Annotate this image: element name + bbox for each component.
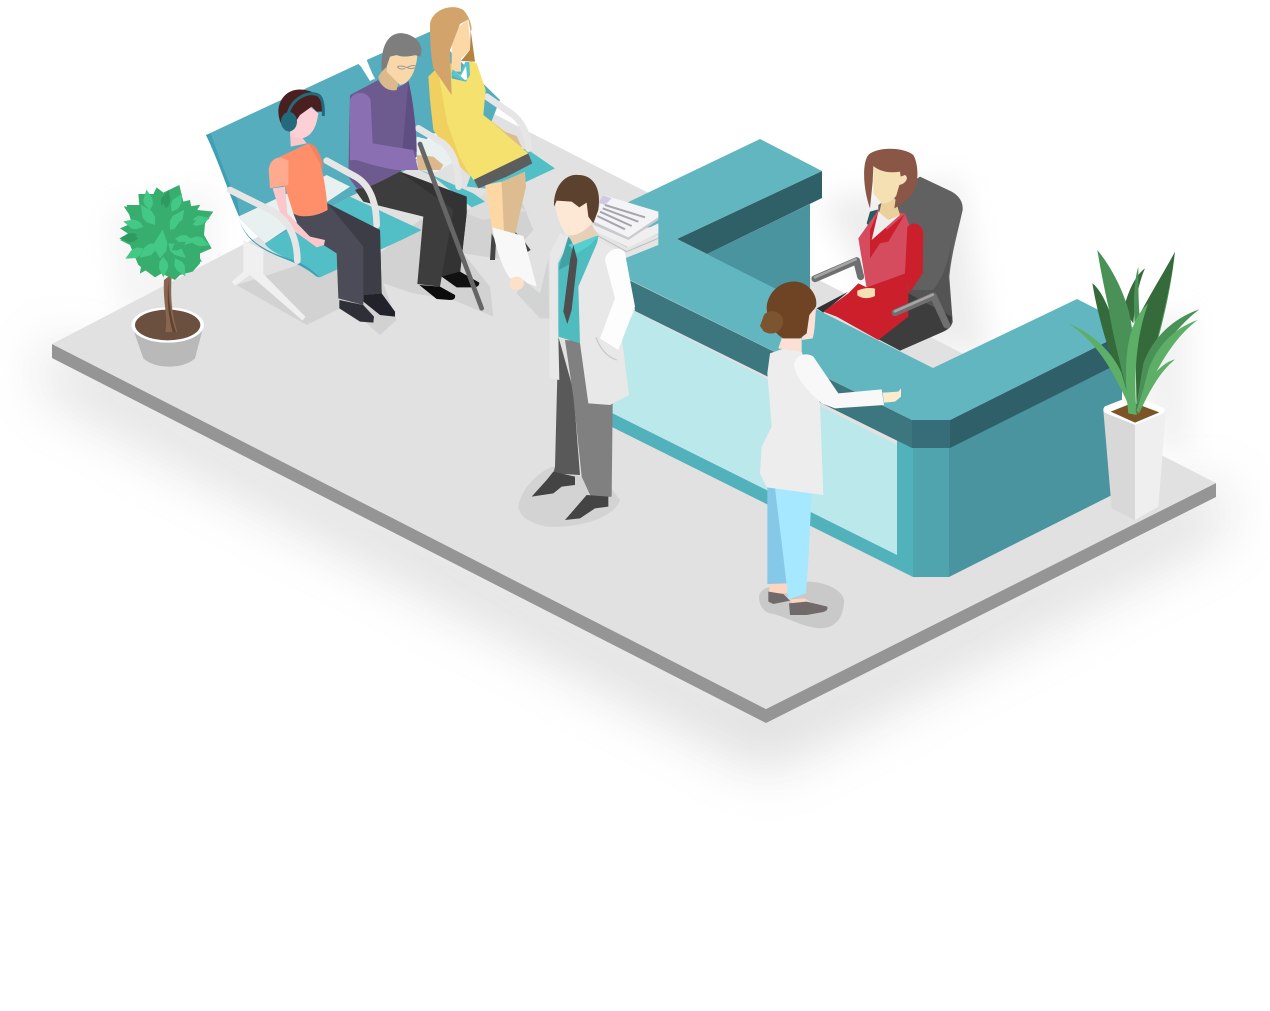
planter <box>1103 396 1166 520</box>
shirt and tie <box>558 236 598 343</box>
neck <box>778 338 802 352</box>
head <box>568 225 598 245</box>
trunk <box>164 274 177 332</box>
inner back face <box>707 204 810 310</box>
bench back left <box>206 64 430 243</box>
corner face <box>913 448 949 577</box>
trousers <box>767 487 787 584</box>
reception desk <box>612 139 1134 577</box>
boy with headphones <box>269 89 395 323</box>
female doctor <box>759 281 901 628</box>
desk top <box>620 139 1134 420</box>
potted plant right <box>1068 250 1199 520</box>
bench legs <box>232 193 530 321</box>
floor platform <box>52 114 1216 723</box>
front armrest <box>895 295 947 325</box>
right fascia <box>950 328 1134 448</box>
office chair <box>815 177 963 351</box>
left arm and hand <box>517 258 549 318</box>
white coat <box>549 233 568 380</box>
receptionist <box>823 149 923 340</box>
stack of papers <box>593 195 658 258</box>
old man with cane <box>348 33 482 308</box>
floor shadow <box>759 582 844 628</box>
feet and shoes <box>769 583 815 607</box>
seats <box>238 140 555 277</box>
leaves <box>1068 250 1199 415</box>
front fascia <box>625 278 912 448</box>
doctor <box>509 175 635 527</box>
waiting bench and seated patients <box>206 7 555 335</box>
glass front panel <box>612 300 897 555</box>
shoes <box>532 472 575 497</box>
bench back right <box>367 32 500 133</box>
soft shadows around the floor <box>45 180 1225 765</box>
chair and receptionist <box>815 149 963 351</box>
pot <box>131 307 204 367</box>
foliage <box>119 185 213 280</box>
middle armrest right <box>418 128 459 187</box>
potted tree <box>119 185 213 367</box>
sheet of paper held by doctor <box>492 227 537 287</box>
floor shadow under bench <box>237 197 533 335</box>
woman in yellow dress <box>428 7 532 260</box>
right face <box>949 362 1122 577</box>
front armrest <box>230 190 297 261</box>
bench gap strip <box>238 175 350 243</box>
middle armrest left <box>327 161 377 225</box>
sleeve <box>794 354 884 408</box>
head <box>802 308 816 340</box>
corner fascia <box>912 420 950 448</box>
rear armrest <box>487 97 529 149</box>
coat <box>760 347 823 495</box>
hand <box>883 388 901 403</box>
trousers <box>553 337 580 475</box>
cane <box>420 144 482 308</box>
base strip <box>612 413 913 577</box>
inner dark fascia <box>677 171 822 254</box>
floor shadow <box>518 467 620 527</box>
